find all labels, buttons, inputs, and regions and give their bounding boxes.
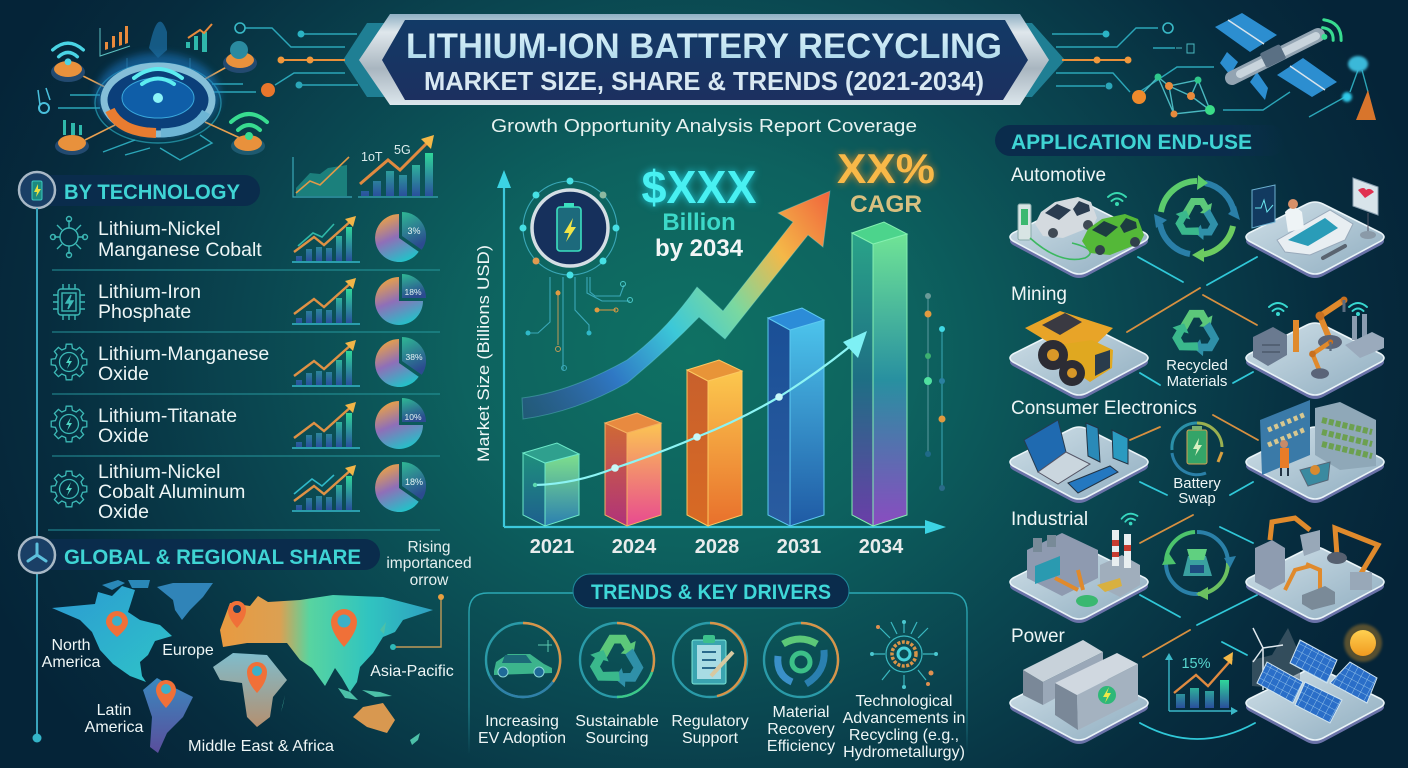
callout: cagr: XX% [837,145,935,192]
africa [213,653,287,727]
mini bar chart [292,278,360,324]
icon: growth chart 15 percent [1165,652,1238,715]
icon: battery swap [1172,423,1222,507]
bar 2031 [768,308,824,526]
year labels: 2024 [612,536,657,558]
application: robot arm factory platform [1246,296,1384,399]
pie chart [375,462,426,512]
region labels: America [85,719,143,736]
region labels: Latin [97,702,131,719]
north america [52,586,172,682]
icon: battery badge [19,172,55,208]
heading: TRENDS & KEY DRIVERS [591,581,831,604]
section header: application end-use [995,125,1285,156]
mini bar chart [292,216,360,262]
icon: network [50,216,88,258]
subtitle: Growth Opportunity Analysis Report Coverage [491,115,917,136]
icon: recycled materials [1166,310,1228,390]
axes [497,170,946,534]
panel: trends and key drivers [469,574,967,761]
top mini charts [293,135,438,197]
south america [143,678,193,753]
greenland [157,583,213,620]
year labels [530,536,904,558]
callout: market value [642,161,757,262]
icon: gear [51,471,87,507]
callout: cagr [837,145,935,218]
driver: regulatory support: Support [682,730,739,747]
bar 2021 [523,443,579,526]
pin: europe [228,601,246,628]
bar 2034 [852,222,907,526]
row: lithium-iron phosphate [53,274,426,325]
y-axis title: Market Size (Billions USD) [475,245,493,462]
pie chart: 10% [404,412,422,422]
heading text: GLOBAL & REGIONAL SHARE [64,546,361,569]
icon: recycled materials: Recycled [1166,357,1228,374]
year labels: 2031 [777,536,821,558]
application labels: Mining [1011,284,1067,305]
icon: battery swap: Battery [1173,475,1221,492]
icon: sun [1344,624,1382,662]
year labels: 2021 [530,536,574,558]
decorative timeline dots [924,293,946,491]
pin: middle east and africa [247,662,267,693]
world map [42,580,454,755]
callout: rising importance: orrow [410,572,449,589]
driver: sustainable sourcing: Sustainable [575,713,659,730]
callout: market value: by 2034 [655,235,744,262]
label: Lithium-Titanate [98,405,237,427]
driver: sustainable sourcing: Sourcing [585,730,649,747]
icon: share badge [19,537,55,573]
application labels [1011,165,1197,647]
growth ribbon arrow [522,191,830,419]
bar chart with trend arrow [358,135,438,197]
pin: asia-pacific [331,609,357,647]
area chart [293,157,352,197]
icon: circular recycling [1162,532,1236,600]
region labels: Europe [162,642,214,659]
pie chart: 38% [405,352,423,362]
header illustration: space station and mesh network [1052,13,1376,120]
bar 2028 [687,360,742,526]
timeline rail [32,208,42,742]
pin: north america [106,611,128,637]
pie chart [375,398,426,449]
label: Phosphate [98,301,191,323]
pie chart [375,274,426,325]
bar 2024 [605,413,661,526]
pie chart: 18% [405,477,423,487]
header illustration: connectivity hub [38,22,358,160]
region labels: North [51,637,91,654]
section header: global and regional share [19,537,380,573]
row: lithium-titanate oxide [51,398,426,449]
pie chart: 18% [404,287,422,297]
driver: EV adoption: Increasing [485,713,559,730]
callout: market value: Billion [662,209,736,236]
trend line [533,331,867,487]
section header: application end-use: APPLICATION END-USE [1011,131,1252,154]
driver: regulatory support: Regulatory [671,713,749,730]
icon: chip [53,284,85,320]
technology row dividers [48,270,440,530]
label 5G: 5G [394,143,411,157]
mini bar chart [292,402,360,448]
region labels: Asia-Pacific [370,663,454,680]
driver: material recovery efficiency: Efficiency [767,738,835,755]
label IoT: 1oT [361,150,383,164]
icon: growth chart 15 percent: 15% [1181,656,1211,672]
heading text: BY TECHNOLOGY [64,181,240,204]
application: retail shelves platform [1246,400,1384,503]
title line 1: LITHIUM-ION BATTERY RECYCLING [406,27,1002,66]
driver: material recovery efficiency: Recovery [767,721,835,738]
icon: gear [51,344,87,380]
icon: recycling loop [1154,175,1240,262]
region labels: Middle East & Africa [188,738,334,755]
label: Oxide [98,501,149,523]
section header: by technology [19,172,260,208]
pin: latin america [156,680,176,708]
label: Lithium-Manganese [98,343,269,365]
callout: cagr: CAGR [850,191,922,218]
driver: sustainable sourcing [575,623,659,747]
application labels: Automotive [1011,165,1106,186]
driver: EV adoption: EV Adoption [478,730,566,747]
label: Oxide [98,425,149,447]
label: Cobalt Aluminum [98,481,245,503]
arctic islands [102,580,150,590]
driver: material recovery efficiency: Material [773,704,829,721]
pie chart: 3% [407,226,421,236]
pie chart [375,212,426,262]
year labels: 2034 [859,536,904,558]
application: automotive platform with EV cars [1010,193,1148,278]
driver: technological advancements: Technological [856,693,952,710]
row: lithium-manganese oxide [51,337,426,387]
callout: rising importance [386,539,472,650]
application: industrial platform with factory [1010,512,1148,623]
application labels: Power [1011,626,1066,647]
pie chart [375,337,426,387]
driver: regulatory support [671,623,749,747]
row: lithium-nickel cobalt aluminum oxide [51,461,426,523]
label: Manganese Cobalt [98,239,262,261]
title banner [343,14,1065,105]
driver: technological advancements: Advancements in [843,710,965,727]
application: power platform with battery containers [1010,640,1148,744]
driver: EV adoption [478,623,566,747]
icon: gear [51,406,87,442]
icon: battery swap: Swap [1178,490,1216,507]
islands [281,622,420,745]
driver: technological advancements: Hydrometallurgy) [843,744,965,761]
australia [353,703,395,733]
mini bar chart [292,340,360,386]
application: robotics assembly platform [1246,518,1384,623]
connector lines [1127,257,1258,739]
driver: technological advancements [843,620,965,761]
driver: technological advancements: Recycling (e.g., [849,727,959,744]
callout: rising importance: importanced [386,555,472,572]
row: lithium-nickel manganese cobalt [50,212,426,262]
eurasia [220,595,433,692]
application: medical platform [1246,178,1384,278]
application: solar and wind platform [1246,624,1384,744]
application labels: Consumer Electronics [1011,398,1197,419]
title line 2: MARKET SIZE, SHARE & TRENDS (2021-2034) [424,66,984,96]
market size bar chart [475,170,946,558]
application labels: Industrial [1011,509,1088,530]
callout: rising importance: Rising [407,539,451,556]
icon: recycled materials: Materials [1167,373,1227,390]
mini bar chart [292,465,360,511]
heading [573,574,849,608]
year labels: 2028 [695,536,739,558]
callout: market value: $XXX [642,161,757,213]
application: consumer electronics platform [1010,420,1148,503]
driver: material recovery efficiency [764,623,838,755]
application: mining platform with dump truck [1010,311,1148,399]
label: Lithium-Iron [98,281,201,303]
region labels [42,637,454,755]
label: Lithium-Nickel [98,218,220,240]
icon: battery badge with circuits [520,178,632,370]
label: Oxide [98,363,149,385]
label: Lithium-Nickel [98,461,220,483]
region labels: America [42,654,100,671]
